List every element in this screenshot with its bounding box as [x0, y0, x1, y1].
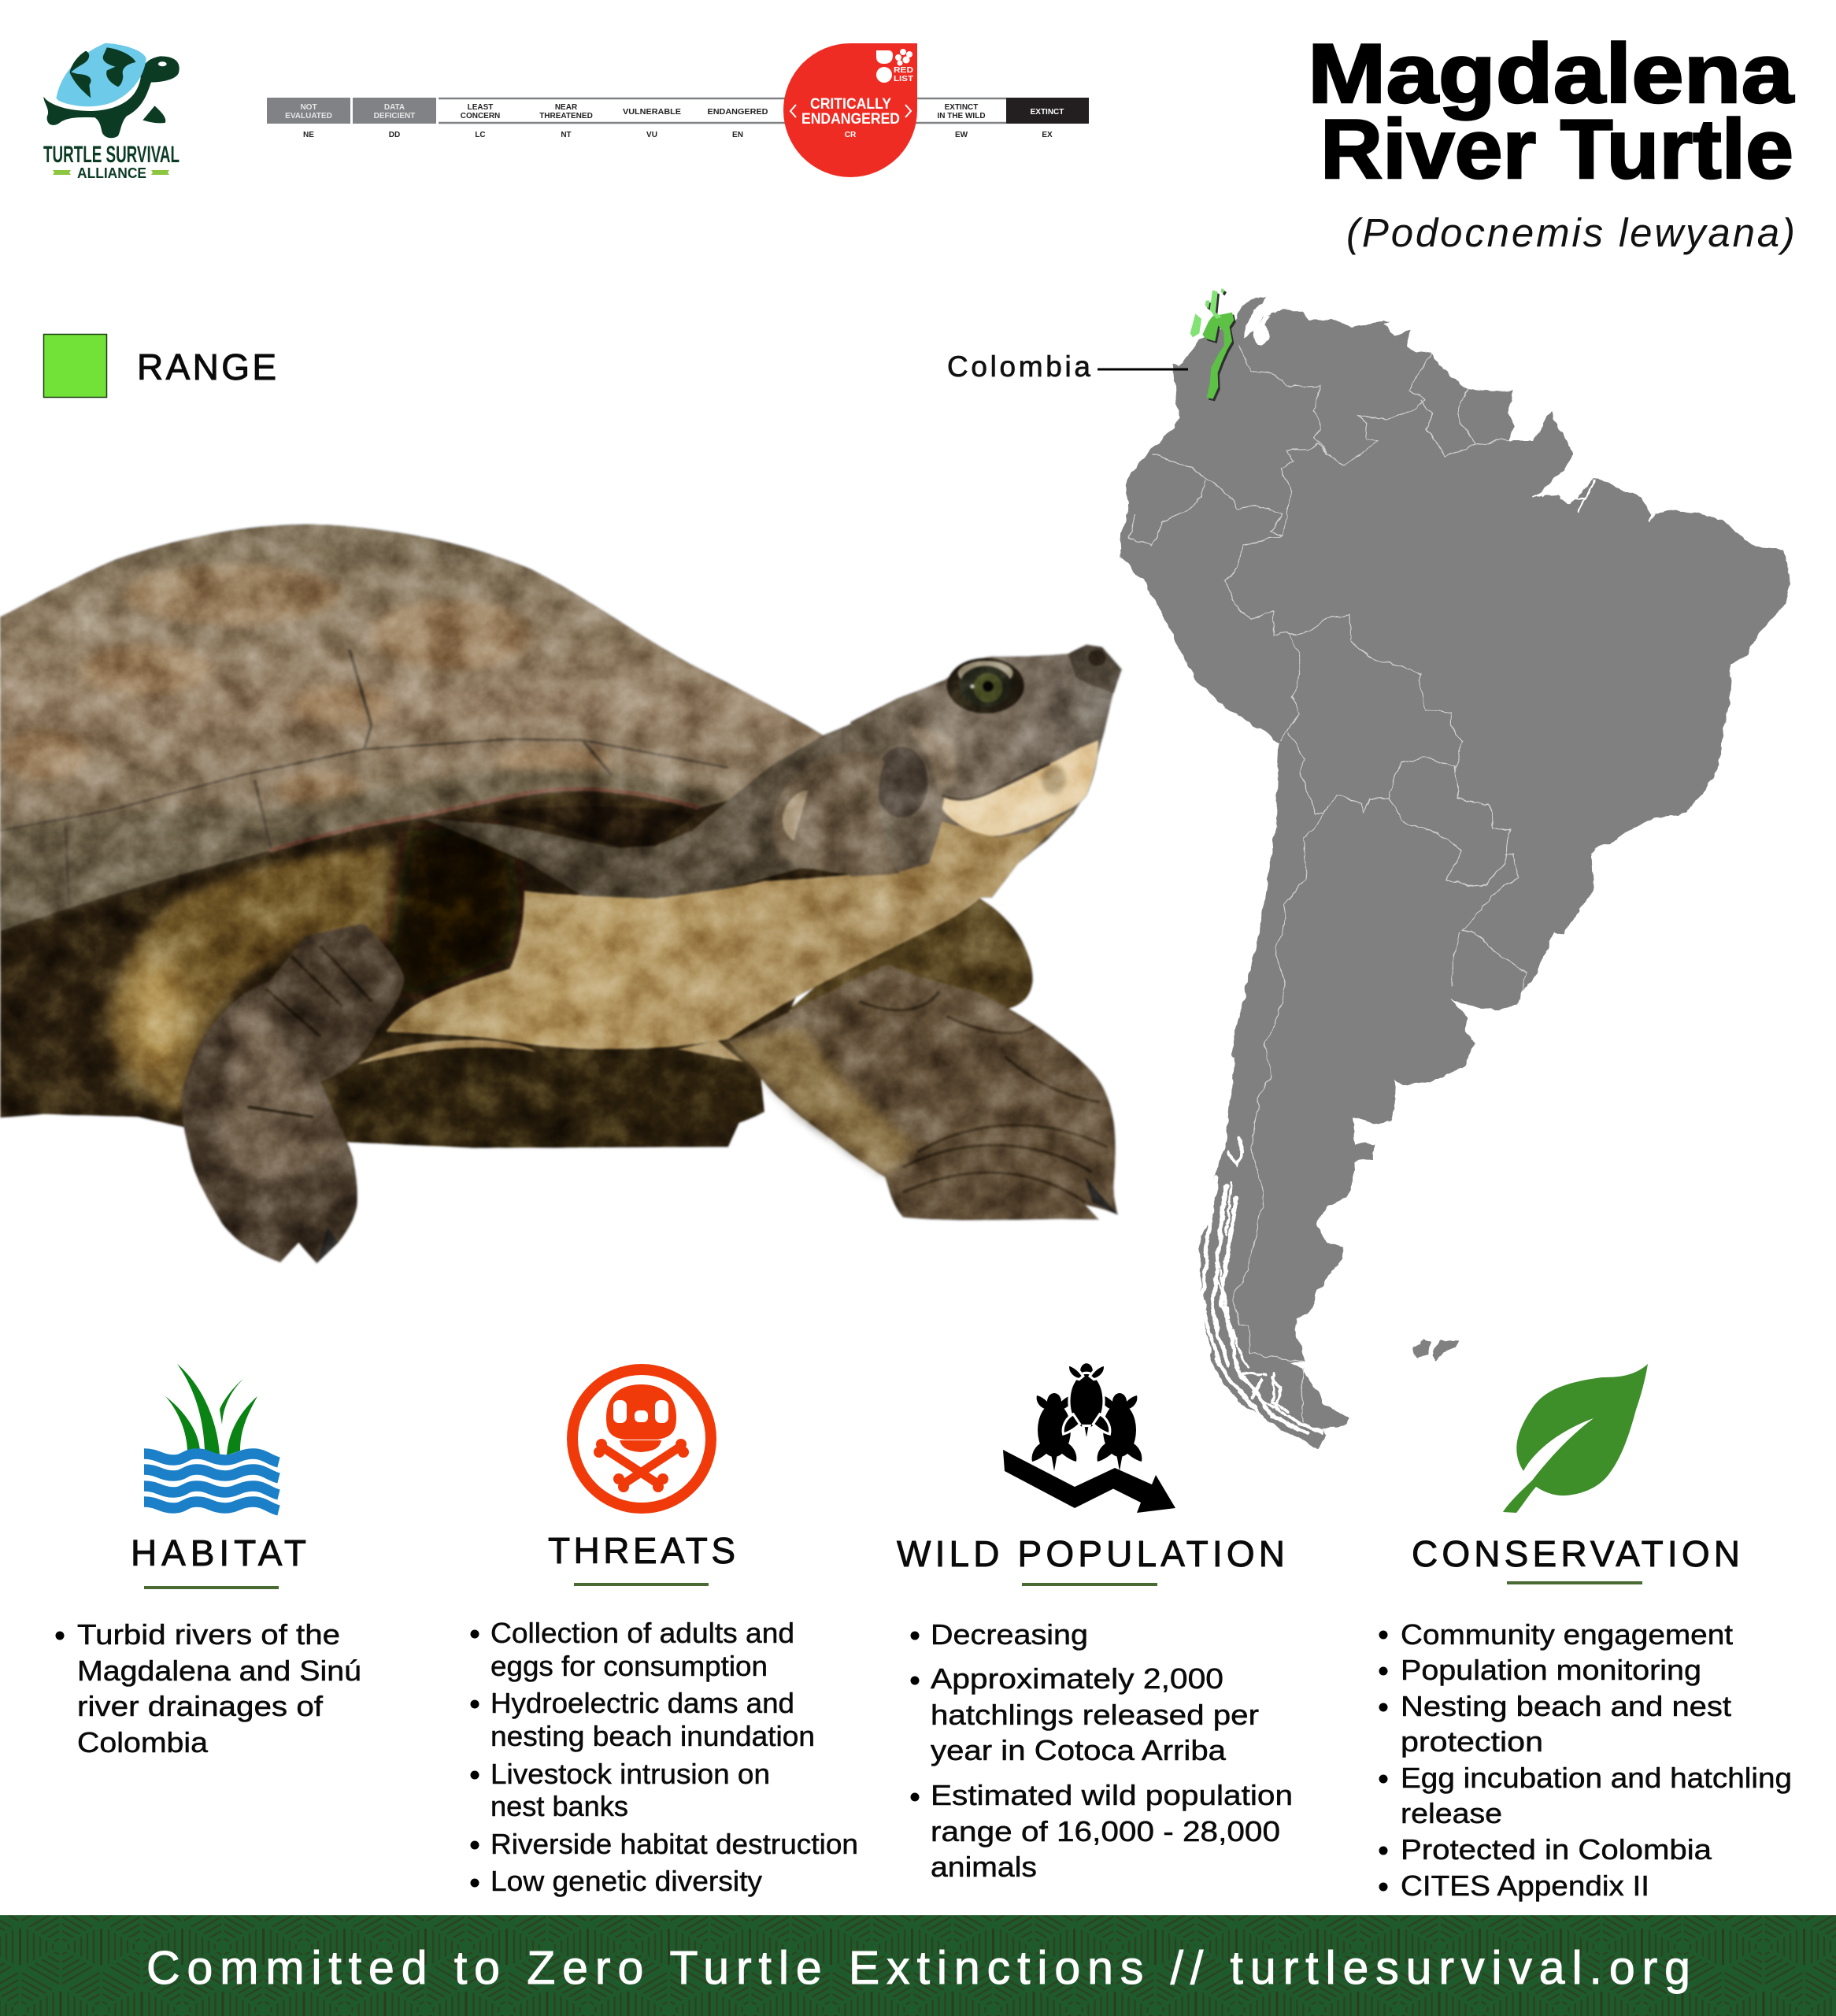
- list: threats: Riverside habitat destruction: [490, 1828, 858, 1860]
- subtitle: scientific name: (Podocnemis lewyana): [1346, 210, 1795, 255]
- status labels: VULNERABLE: [623, 108, 681, 117]
- heading: habitat: HABITAT: [131, 1532, 306, 1573]
- water: [144, 1454, 279, 1510]
- critically endangered badge: [783, 43, 917, 177]
- status labels: [461, 103, 986, 120]
- icon: conservation leaf: [1503, 1364, 1648, 1513]
- list: habitat: Colombia: [77, 1726, 209, 1758]
- list: wild population: animals: [931, 1851, 1037, 1883]
- legend: range: RANGE: [137, 346, 276, 387]
- lower jaw and throat: [850, 809, 1076, 898]
- status labels: IN THE WILD: [937, 112, 986, 120]
- left leg palm: [219, 999, 342, 1182]
- critically endangered badge: ENDANGERED: [801, 111, 900, 128]
- critically endangered badge: LIST: [894, 75, 913, 83]
- list: habitat: [55, 1618, 361, 1758]
- list: conservation: Community engagement: [1401, 1618, 1733, 1651]
- logo sub-wordmark: ALLIANCE: [77, 165, 146, 181]
- critically endangered badge: CRITICALLY: [810, 96, 891, 113]
- category codes: [303, 131, 1053, 139]
- land mass: [1120, 295, 1790, 1447]
- water details: [1253, 299, 1564, 963]
- eye: [947, 658, 1024, 713]
- list: wild population: year in Cotoca Arriba: [931, 1734, 1227, 1766]
- range overlay: Magdalena and Sinú drainages: [1190, 288, 1236, 401]
- list: habitat: Magdalena and Sinú: [77, 1655, 361, 1687]
- turtle ear lobe: [772, 751, 899, 875]
- not evaluated: EVALUATED: [285, 112, 332, 120]
- mouth line: [942, 764, 1049, 799]
- category codes: NT: [561, 131, 572, 139]
- front leg highlight: [728, 1027, 918, 1177]
- pale brow: [908, 727, 958, 793]
- status labels: EXTINCT: [945, 103, 978, 112]
- list: conservation: Nesting beach and nest: [1401, 1690, 1731, 1722]
- status labels: NEAR: [555, 103, 578, 112]
- not evaluated: NOT: [300, 103, 317, 112]
- title: River Turtle: [1320, 102, 1793, 196]
- list: habitat: Turbid rivers of the: [77, 1618, 340, 1651]
- red list status bar: [267, 43, 1089, 177]
- status labels: THREATENED: [539, 112, 593, 120]
- snout: [1068, 644, 1122, 693]
- sand on jaw: [1042, 765, 1065, 794]
- critically endangered badge: RED: [894, 66, 913, 75]
- flank: [109, 846, 408, 1112]
- list: conservation: Protected in Colombia: [1401, 1833, 1712, 1866]
- list: threats: Livestock intrusion on: [490, 1758, 770, 1790]
- list: threats: Low genetic diversity: [490, 1865, 762, 1897]
- list: threats: Collection of adults and: [490, 1617, 794, 1649]
- delta and fjords: [1203, 461, 1656, 1433]
- status labels: ENDANGERED: [707, 108, 768, 117]
- category codes: LC: [475, 131, 486, 139]
- list: habitat: river drainages of: [77, 1690, 324, 1722]
- shadow hollow: [386, 825, 520, 1002]
- plastron: [328, 1040, 764, 1148]
- dark ear patch: [875, 747, 927, 817]
- list: conservation: Egg incubation and hatchling: [1401, 1762, 1792, 1794]
- title: [1308, 26, 1795, 196]
- legend: range: [44, 334, 276, 397]
- lower neck and chest: [386, 846, 1020, 1050]
- not evaluated: [267, 98, 350, 124]
- map: South America: [947, 288, 1790, 1447]
- list: wild population: hatchlings released per: [931, 1699, 1259, 1731]
- reeds: [165, 1364, 257, 1455]
- data deficient: DATA: [384, 103, 405, 112]
- category codes: VU: [646, 131, 657, 139]
- left leg folds: [247, 946, 372, 1117]
- category codes: EN: [732, 131, 743, 139]
- icon: habitat water and reeds: [144, 1364, 279, 1510]
- status labels: CONCERN: [461, 112, 500, 120]
- shell: [0, 524, 823, 931]
- list: wild population: [910, 1618, 1293, 1883]
- list: threats: eggs for consumption: [490, 1650, 768, 1682]
- list: wild population: range of 16,000 - 28,000: [931, 1815, 1280, 1847]
- list: wild population: Approximately 2,000: [931, 1662, 1223, 1695]
- list: conservation: [1379, 1618, 1792, 1902]
- turtle head: [850, 644, 1122, 898]
- plastron lip: [357, 1040, 743, 1064]
- list: conservation: protection: [1401, 1725, 1543, 1758]
- extinct: EXTINCT: [1031, 108, 1064, 117]
- shell scutes: [0, 650, 728, 906]
- icon: turtle globe logo: [43, 43, 180, 138]
- status labels: LEAST: [468, 103, 493, 112]
- far flipper: [787, 896, 1033, 1011]
- list: conservation: CITES Appendix II: [1401, 1870, 1649, 1902]
- footer banner: Committed to Zero Turtle Extinctions // turtlesurvival.org: [146, 1942, 1690, 1994]
- logo ribbon: [53, 170, 169, 175]
- heading: conservation: CONSERVATION: [1412, 1533, 1740, 1574]
- body: [0, 755, 946, 1148]
- status band: [439, 98, 1006, 123]
- logo: Turtle Survival Alliance: [43, 43, 180, 181]
- critically endangered badge: CR: [845, 131, 857, 139]
- right foot folds: [860, 991, 1107, 1203]
- shell blotches: [0, 565, 612, 810]
- list: threats: [471, 1617, 858, 1897]
- Falkland Islands: [1411, 1339, 1458, 1360]
- category codes: EX: [1042, 131, 1053, 139]
- category codes: NE: [303, 131, 314, 139]
- photo: turtle: [0, 524, 1122, 1264]
- front leg right: [728, 964, 1118, 1220]
- extinct: [1006, 98, 1089, 124]
- callout: Colombia: Colombia: [947, 350, 1090, 383]
- icon: wild population decline: [1003, 1362, 1175, 1513]
- heading: wild population: WILD POPULATION: [897, 1533, 1285, 1574]
- shell rim shade: [0, 769, 735, 931]
- list: threats: nesting beach inundation: [490, 1720, 815, 1752]
- category codes: EW: [955, 131, 968, 139]
- list: wild population: Decreasing: [931, 1618, 1088, 1651]
- icon: threats skull and crossbones: [572, 1369, 711, 1508]
- shell cavity: [495, 806, 695, 847]
- title: Magdalena: [1308, 26, 1795, 120]
- list: threats: Hydroelectric dams and: [490, 1687, 794, 1719]
- list: conservation: Population monitoring: [1401, 1654, 1701, 1686]
- data deficient: [353, 98, 436, 124]
- claws: [316, 1177, 1118, 1264]
- data deficient: DEFICIENT: [374, 112, 415, 120]
- list: threats: nest banks: [490, 1790, 628, 1822]
- category codes: DD: [389, 131, 400, 139]
- upper neck: [422, 702, 910, 899]
- footer banner: [0, 1915, 1836, 2016]
- nostril: [1088, 650, 1106, 665]
- heading: threats: THREATS: [548, 1530, 735, 1571]
- logo wordmark: TURTLE SURVIVAL: [43, 142, 180, 168]
- shell edge: [269, 789, 699, 850]
- list: conservation: release: [1401, 1797, 1502, 1829]
- left leg: [182, 924, 404, 1264]
- list: wild population: Estimated wild population: [931, 1779, 1293, 1811]
- flank highlight: [124, 956, 189, 1077]
- country borders: [1131, 343, 1526, 1421]
